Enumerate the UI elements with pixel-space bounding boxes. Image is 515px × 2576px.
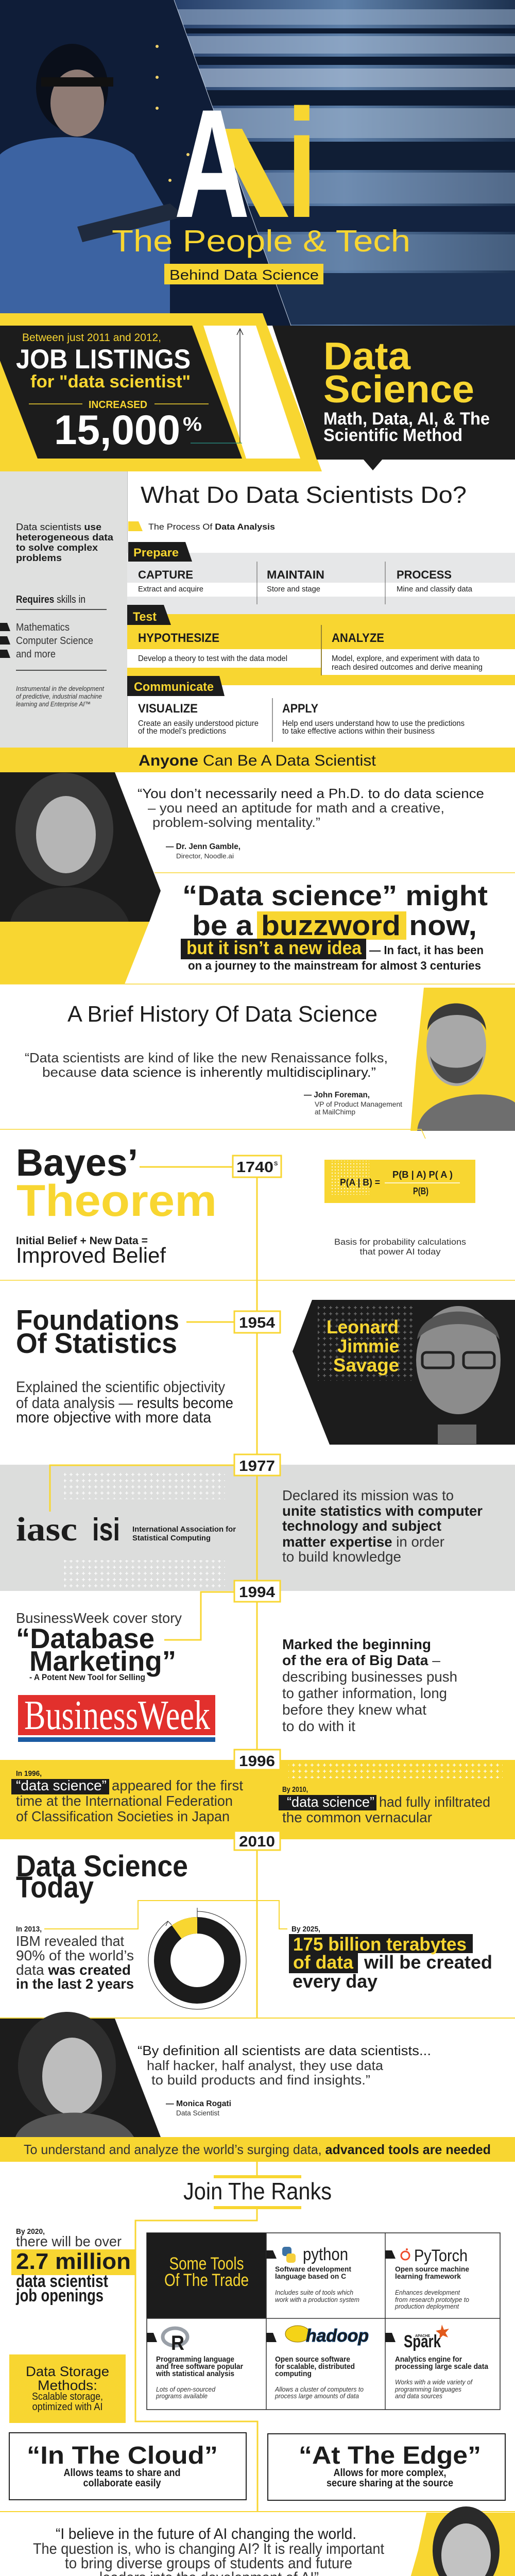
- panel: Prepare: Prepare: [133, 546, 179, 559]
- panel: Prepare: Mine and classify data: [397, 585, 473, 594]
- heading: A Brief History Of Data Science: A Brief History Of Data Science: [67, 1002, 377, 1027]
- timeline: 1996 and 2010 data science term: had fully infiltrated: [379, 1794, 490, 1810]
- panel: tools of the trade grid: computing: [275, 2369, 312, 2378]
- panel: tools of the trade grid: for scalable, distributed: [275, 2362, 355, 2371]
- photo: Leonard Jimmie Savage: Jimmie: [337, 1335, 399, 1357]
- panel: tools of the trade grid: and data sources: [395, 2392, 442, 2400]
- icon: Spark: [404, 2325, 449, 2351]
- timeline: Foundations Of Statistics 1954: Of Statistics: [16, 1327, 177, 1359]
- timeline: BusinessWeek 1994: [16, 1581, 457, 1742]
- timeline: Bayes' Theorem 1740s: 1740: [236, 1159, 273, 1176]
- panel: tools of the trade grid: Open source machine: [395, 2265, 469, 2273]
- quote: Monica Rogati: “By definition all scientists are data scientists...: [138, 2043, 431, 2058]
- subtitle box: Behind Data Science: [164, 264, 323, 284]
- formula: Bayes: P(B | A) P( A ): [392, 1170, 453, 1180]
- panel: skills sidebar: [0, 471, 128, 748]
- timeline: BusinessWeek 1994: - A Potent New Tool for Selling: [29, 1672, 145, 1682]
- timeline: BusinessWeek 1994: BusinessWeek cover story: [16, 1610, 182, 1626]
- timeline: Bayes' Theorem 1740s: Improved Belief: [16, 1243, 166, 1267]
- timeline: 1996 and 2010 data science term: the common vernacular: [282, 1809, 432, 1825]
- panel: tools of the trade grid: with statistical analysis: [156, 2369, 234, 2378]
- timeline: BusinessWeek 1994: to do with it: [282, 1718, 355, 1734]
- timeline: Foundations Of Statistics 1954: Explained the scientific objectivity: [16, 1379, 225, 1396]
- formula: Bayes: [324, 1160, 475, 1257]
- heading: Data Science Today: Data Science: [16, 1850, 188, 1883]
- banner: advanced tools are needed: To understand and analyze the world’s surging data, advanced tools are needed: [24, 2142, 491, 2157]
- stat: IBM 90%: data was created: [16, 1962, 131, 1978]
- stat: IBM 90%: in the last 2 years: [16, 1976, 134, 1992]
- panel: In The Cloud: [9, 2433, 246, 2500]
- icon: PyTorch: PyTorch: [414, 2246, 468, 2265]
- timeline: IASC 1977: technology and subject: [282, 1518, 441, 1534]
- quote: Fei Fei Li: “I believe in the future of AI changing the world.: [56, 2526, 356, 2543]
- chart: donut 90%: [148, 1908, 246, 2009]
- callout: buzzword statement: “Data science” might: [182, 879, 488, 911]
- panel: skills sidebar: Requires skills in: [16, 594, 85, 605]
- panel: skills sidebar: to solve complex: [16, 543, 98, 553]
- stat: 175 billion terabytes: By 2025,: [291, 1925, 320, 1934]
- panel: At The Edge: Allows for more complex,: [334, 2467, 446, 2479]
- title: AI logo: i: [286, 77, 317, 250]
- timeline: 1996 and 2010 data science term: 1996: [239, 1753, 275, 1770]
- arrow: growth: [191, 329, 243, 443]
- panel: data storage methods: Methods:: [38, 2378, 97, 2393]
- panel: tools of the trade grid: and free software popular: [156, 2362, 243, 2371]
- timeline: BusinessWeek 1994: describing businesses push: [282, 1669, 457, 1685]
- logo: iasc isi: [16, 1511, 236, 1548]
- timeline: IASC 1977: 1977: [239, 1458, 275, 1475]
- panel: tools of the trade grid: Analytics engine for: [395, 2355, 462, 2364]
- panel: skills sidebar: learning and Enterprise AI™: [16, 700, 91, 708]
- photo: Monica Rogati: [0, 2012, 161, 2137]
- timeline: BusinessWeek 1994: 1994: [239, 1584, 275, 1601]
- panel: tools of the trade grid: work with a production system: [275, 2296, 359, 2303]
- timeline: Foundations Of Statistics 1954: 1954: [239, 1315, 275, 1331]
- icon: Spark: APACHE: [415, 2334, 430, 2338]
- panel: tools of the trade grid: [147, 2233, 500, 2410]
- stat: 175 billion terabytes: will be created: [364, 1952, 492, 1973]
- panel: In The Cloud: Allows teams to share and: [64, 2467, 180, 2479]
- panel: Data Science heading: Math, Data, AI, & The: [323, 409, 490, 429]
- subheading: process of data analysis: The Process Of Data Analysis: [148, 522, 275, 532]
- stat: 2.7 million job openings: By 2020,: [16, 2227, 45, 2236]
- timeline: BusinessWeek 1994: “Database: [16, 1622, 154, 1654]
- panel: data storage methods: Scalable storage,: [32, 2391, 103, 2402]
- panel: Prepare: CAPTURE: [138, 568, 193, 581]
- panel: Prepare: MAINTAIN: [267, 568, 324, 581]
- timeline: Bayes' Theorem 1740s: Bayes’: [16, 1141, 138, 1184]
- quote: Jenn Gamble: Director, Noodle.ai: [176, 852, 234, 860]
- banner: Anyone Can Be A Data Scientist: Anyone Can Be A Data Scientist: [139, 752, 376, 769]
- quote: Monica Rogati: to build products and find insights.”: [151, 2072, 370, 2088]
- callout: buzzword statement: be a buzzword now,: [192, 909, 477, 941]
- timeline: Foundations Of Statistics 1954: more objective with more data: [16, 1409, 211, 1426]
- quote: Jenn Gamble: problem-solving mentality.”: [152, 815, 320, 830]
- quote: Jenn Gamble: [138, 786, 484, 860]
- heading: What Do Data Scientists Do?: What Do Data Scientists Do?: [141, 482, 467, 508]
- timeline vertical line: [256, 1178, 258, 2018]
- panel: tools of the trade grid: production deployment: [394, 2302, 459, 2310]
- timeline: 1996 and 2010 data science term: of Classification Societies in Japan: [16, 1808, 230, 1824]
- photo: Leonard Jimmie Savage: Savage: [333, 1354, 399, 1376]
- panel: tools of the trade grid: Open source software: [275, 2355, 350, 2364]
- panel: Test: [127, 605, 515, 685]
- panel: tools of the trade grid: language based on C: [275, 2272, 346, 2280]
- panel: Communicate: APPLY: [282, 702, 318, 716]
- timeline: IASC 1977: [16, 1454, 483, 1589]
- timeline: Foundations Of Statistics 1954: Foundations: [16, 1304, 179, 1336]
- timeline: 1996 and 2010 data science term: “data science”: [16, 1777, 107, 1793]
- title: The People & Tech: The People & Tech: [112, 224, 410, 258]
- panel: tools of the trade grid: programming languages: [394, 2385, 461, 2393]
- photo: John Foreman: [410, 988, 515, 1131]
- panel: skills sidebar: of predictive, industrial machine: [16, 692, 102, 700]
- panel: data storage methods: Data Storage: [26, 2364, 109, 2379]
- timeline: IASC 1977: Declared its mission was to: [282, 1487, 454, 1503]
- panel: Test: reach desired outcomes and derive meaning: [332, 663, 483, 672]
- panel: data storage methods: [9, 2354, 126, 2423]
- timeline: 1996 and 2010 data science term: time at the International Federation: [16, 1793, 233, 1809]
- panel: tools of the trade grid: programs available: [156, 2392, 208, 2400]
- stat: 2.7 million job openings: data scientist: [16, 2272, 108, 2291]
- timeline: Bayes' Theorem 1740s: S: [274, 1161, 278, 1167]
- timeline: 1996 and 2010 data science term: appeared for the first: [112, 1777, 243, 1793]
- heading: Join The Ranks: Join The Ranks: [183, 2178, 332, 2205]
- timeline: Bayes' Theorem 1740s: [16, 1141, 281, 1267]
- callout: buzzword statement: [181, 879, 488, 972]
- panel: tools of the trade grid: Allows a cluster of computers to: [274, 2385, 364, 2393]
- banner: Anyone Can Be A Data Scientist: [0, 748, 515, 772]
- panel: tools of the trade grid: processing large scale data: [395, 2362, 489, 2371]
- timeline: BusinessWeek 1994: of the era of Big Data –: [282, 1652, 440, 1668]
- timeline: 1996 and 2010 data science term: By 2010,: [282, 1785, 308, 1794]
- stat: IBM 90%: In 2013,: [16, 1925, 42, 1934]
- panel: job listings stat: INCREASED: [89, 399, 147, 411]
- logo: iasc isi: isi: [92, 1512, 120, 1548]
- quote: Monica Rogati: — Monica Rogati: [166, 2099, 231, 2108]
- panel: Test: HYPOTHESIZE: [138, 631, 219, 645]
- panel: In The Cloud: “In The Cloud”: [27, 2442, 218, 2469]
- quote: Jenn Gamble: – you need an aptitude for math and a creative,: [148, 800, 444, 816]
- panel: Communicate: Help end users understand how to use the predictions: [282, 719, 465, 728]
- timeline: Foundations Of Statistics 1954: of data analysis — results become: [16, 1395, 233, 1412]
- panel: tools of the trade grid: Of The Trade: [164, 2270, 249, 2290]
- quote: John Foreman: — John Foreman,: [304, 1091, 370, 1099]
- formula: Bayes: that power AI today: [359, 1247, 441, 1257]
- panel: Data Science heading: Scientific Method: [323, 426, 462, 445]
- icon: python: [282, 2245, 348, 2264]
- panel: Prepare: PROCESS: [397, 568, 452, 581]
- panel: job listings stat: [0, 313, 322, 471]
- panel: At The Edge: [268, 2434, 505, 2500]
- heading: Data Science Today: Today: [16, 1871, 94, 1904]
- quote: Jenn Gamble: — Dr. Jenn Gamble,: [166, 842, 241, 851]
- panel: tools of the trade grid: Some Tools: [169, 2254, 244, 2274]
- photo: Leonard Jimmie Savage: Leonard: [327, 1316, 399, 1337]
- panel: At The Edge: secure sharing at the source: [327, 2478, 453, 2489]
- panel: skills sidebar: Data scientists use: [16, 522, 101, 532]
- heading: Join The Ranks: [183, 2162, 332, 2209]
- icon: hadoop: hadoop: [306, 2326, 369, 2346]
- panel: tools of the trade grid: Includes suite of tools which: [275, 2289, 353, 2296]
- photo: Dr. Fei Fei Li: [408, 2506, 515, 2576]
- panel: data storage methods: optimized with AI: [32, 2401, 103, 2413]
- formula: Bayes: P(A | B) =: [340, 1177, 380, 1188]
- stat: IBM 90%: IBM revealed that: [16, 1933, 124, 1949]
- stat: 2.7 million job openings: there will be over: [16, 2233, 122, 2249]
- quote: John Foreman: VP of Product Management: [315, 1100, 402, 1108]
- formula: Bayes: P(B): [413, 1186, 428, 1196]
- timeline backgrounds: [0, 1465, 515, 1839]
- banner: advanced tools are needed: [0, 2137, 515, 2162]
- logo: iasc isi: iasc: [16, 1511, 77, 1548]
- panel: Data Science heading: Science: [323, 367, 474, 411]
- icon: Spark: Spark: [404, 2332, 441, 2351]
- panel: Communicate: Communicate: [134, 680, 214, 694]
- timeline: BusinessWeek 1994: to gather information, long: [282, 1685, 447, 1701]
- timeline: 1996 and 2010 data science term: In 1996,: [16, 1769, 42, 1778]
- timeline: Bayes' Theorem 1740s: Initial Belief + New Data =: [16, 1235, 148, 1247]
- panel: Prepare: [127, 542, 515, 614]
- callout: buzzword statement: but it isn’t a new idea: [186, 937, 362, 958]
- panel: Test: Test: [133, 610, 157, 624]
- quote: Fei Fei Li: The question is, who is changing AI? It is really important: [33, 2540, 385, 2557]
- panel: job listings stat: %: [183, 414, 202, 435]
- panel: Test: ANALYZE: [332, 631, 384, 645]
- panel: tools of the trade grid: Programming language: [156, 2355, 234, 2364]
- heading: Data Science Today: [16, 1850, 188, 1904]
- quote: Fei Fei Li: to bring diverse groups of students and future: [65, 2555, 352, 2572]
- subtitle box: Behind Data Science: Behind Data Science: [169, 267, 319, 283]
- panel: Communicate: VISUALIZE: [138, 702, 198, 716]
- timeline: 1996 and 2010 data science term: 2010: [239, 1834, 275, 1850]
- quote: Monica Rogati: Data Scientist: [176, 2109, 219, 2117]
- panel: skills sidebar: heterogeneous data: [16, 532, 114, 543]
- panel: job listings stat: Between just 2011 and 2012,: [22, 332, 161, 344]
- panel: tools of the trade grid: learning framework: [395, 2272, 461, 2280]
- stat: IBM 90%: 90% of the world’s: [16, 1947, 134, 1963]
- logo: BusinessWeek: BusinessWeek: [24, 1693, 210, 1738]
- stat: 2.7 million job openings: [11, 2227, 135, 2306]
- panel: Communicate: of the model’s predictions: [138, 727, 226, 736]
- panel: Prepare: Extract and acquire: [138, 585, 203, 594]
- hero photo: [0, 0, 515, 326]
- panel: Communicate: [127, 676, 465, 742]
- panel: tools of the trade grid: Software development: [275, 2265, 351, 2273]
- icon: R: R: [171, 2332, 184, 2354]
- stat: IBM 90%: [16, 1925, 134, 1992]
- panel: Test: Model, explore, and experiment with data to: [332, 654, 479, 663]
- panel: skills sidebar: Instrumental in the development: [16, 685, 105, 692]
- panel: tools of the trade grid: Works with a wide variety of: [395, 2378, 473, 2386]
- timeline: 1996 and 2010 data science term: “data science”: [287, 1794, 374, 1810]
- quote: John Foreman: because data science is inherently multidisciplinary.”: [42, 1064, 376, 1080]
- timeline: BusinessWeek 1994: Marketing”: [29, 1645, 176, 1677]
- panel: tools of the trade grid: Lots of open-sourced: [156, 2385, 216, 2393]
- panel: In The Cloud: collaborate easily: [83, 2478, 161, 2489]
- timeline: Foundations Of Statistics 1954: [16, 1304, 280, 1426]
- quote: Jenn Gamble: “You don’t necessarily need a Ph.D. to do data science: [138, 786, 484, 801]
- panel: tools of the trade grid: Enhances development: [395, 2289, 460, 2296]
- quote: John Foreman: [25, 1050, 402, 1116]
- panel: job listings stat: JOB LISTINGS: [16, 344, 191, 375]
- timeline: Bayes' Theorem 1740s: Theorem: [16, 1176, 217, 1226]
- panel: job listings stat: 15,000: [54, 407, 180, 453]
- stat: 2.7 million job openings: 2.7 million: [16, 2249, 131, 2274]
- photo: Leonard Jimmie Savage: [293, 1300, 515, 1445]
- panel: Communicate: to take effective actions within their business: [282, 727, 435, 736]
- panel: Communicate: Create an easily understood picture: [138, 719, 259, 728]
- panel: Test: Develop a theory to test with the data model: [138, 654, 287, 663]
- stat: 175 billion terabytes: of data: [293, 1952, 354, 1973]
- panel: At The Edge: “At The Edge”: [299, 2442, 481, 2469]
- panel: job listings stat: for "data scientist": [30, 372, 191, 392]
- timeline: 1996 and 2010 data science term: [11, 1750, 503, 1850]
- stat: 175 billion terabytes: every day: [293, 1971, 377, 1992]
- timeline: IASC 1977: unite statistics with computer: [282, 1503, 483, 1519]
- formula: Bayes: Basis for probability calculations: [334, 1237, 466, 1247]
- timeline: IASC 1977: to build knowledge: [282, 1549, 401, 1565]
- quote: John Foreman: “Data scientists are kind of like the new Renaissance folks,: [25, 1050, 388, 1065]
- icon: python: python: [303, 2245, 348, 2264]
- panel: Data Science heading: [272, 326, 515, 470]
- callout: buzzword statement: — In fact, it has been: [369, 943, 484, 957]
- title: AI logo: A: [174, 77, 250, 250]
- photo: Dr. Jenn Gamble: [0, 772, 161, 984]
- timeline: BusinessWeek 1994: Marked the beginning: [282, 1636, 431, 1652]
- panel: skills sidebar: problems: [16, 553, 62, 563]
- panel: skills sidebar: and more: [16, 649, 56, 660]
- panel: Prepare: Store and stage: [267, 585, 320, 594]
- panel: skills sidebar: Mathematics: [16, 622, 70, 633]
- stat: 2.7 million job openings: job openings: [15, 2286, 104, 2306]
- callout: buzzword statement: on a journey to the mainstream for almost 3 centuries: [188, 959, 481, 972]
- icon: R: [163, 2328, 187, 2354]
- logo: iasc isi: International Association for: [132, 1525, 236, 1534]
- panel: tools of the trade grid: from research prototype to: [395, 2296, 469, 2303]
- quote: Monica Rogati: half hacker, half analyst, they use data: [147, 2058, 384, 2073]
- panel: Data Science heading: Data: [323, 334, 411, 378]
- logo: iasc isi: Statistical Computing: [132, 1534, 211, 1543]
- timeline: BusinessWeek 1994: before they knew what: [282, 1702, 426, 1718]
- panel: tools of the trade grid: process large amounts of data: [274, 2392, 359, 2400]
- quote: Monica Rogati: [138, 2043, 431, 2117]
- stat: 175 billion terabytes: [289, 1925, 492, 1992]
- timeline: IASC 1977: matter expertise in order: [282, 1534, 444, 1550]
- panel: skills sidebar: Computer Science: [16, 635, 93, 647]
- stat: 175 billion terabytes: 175 billion terabytes: [293, 1934, 467, 1955]
- quote: John Foreman: at MailChimp: [315, 1108, 355, 1116]
- quote: Fei Fei Li: [33, 2526, 404, 2576]
